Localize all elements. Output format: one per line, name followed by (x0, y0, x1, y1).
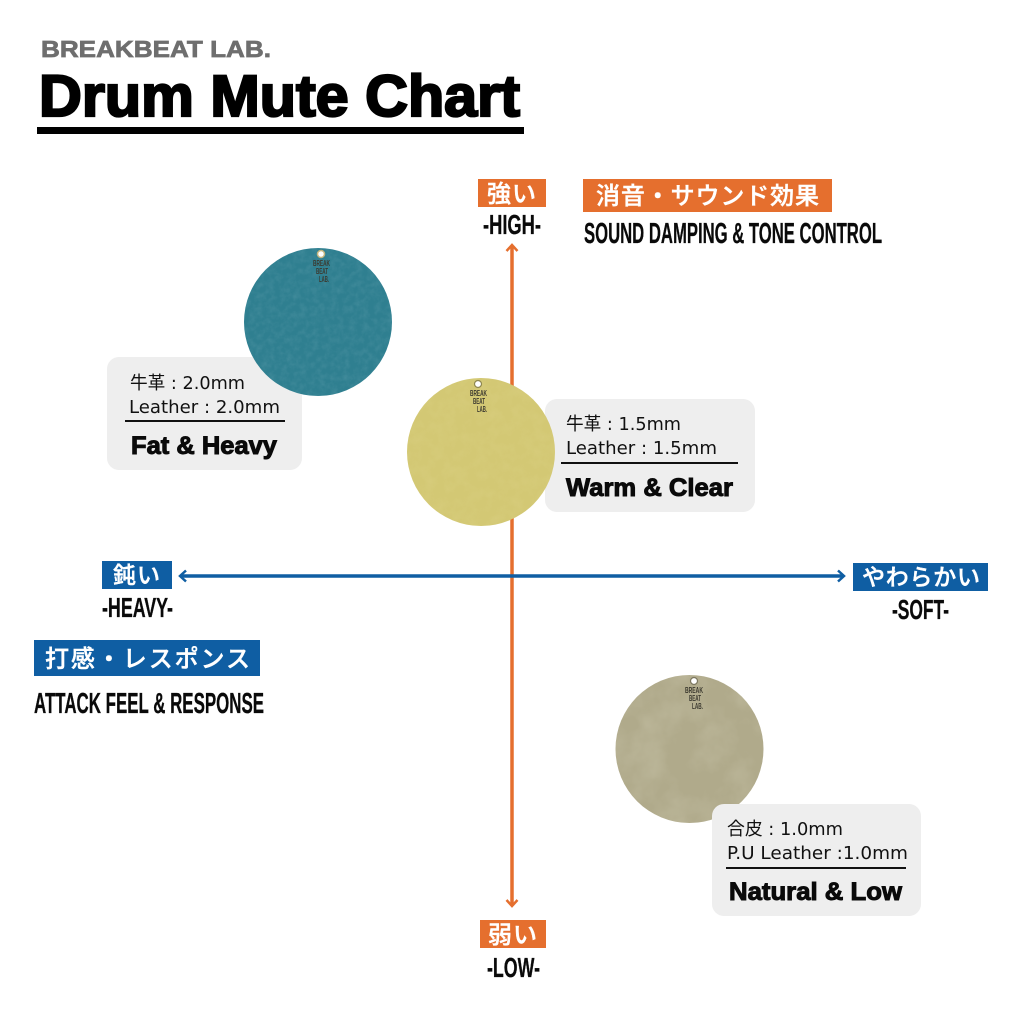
mute disc: teal 2.0mm leather (244, 248, 392, 396)
card: Natural & Low: Natural & Low (729, 878, 903, 906)
mute disc: natural 1.0mm PU leather: BREAK (685, 686, 703, 695)
mute disc: yellow 1.5mm leather: LAB. (477, 405, 487, 414)
bottom axis label: 弱い (488, 922, 538, 949)
mute disc: yellow 1.5mm leather: BREAK (470, 389, 487, 398)
card: Natural & Low (712, 804, 921, 916)
top axis label (478, 179, 546, 240)
brand name: BREAKBEAT LAB. (41, 36, 271, 62)
vertical axis arrow: sound damping (506, 245, 518, 906)
left axis label (102, 561, 173, 623)
mute disc: teal 2.0mm leather: LAB. (319, 275, 329, 284)
horizontal axis heading: 打感・レスポンス (45, 645, 250, 673)
left axis label: 鈍い (113, 562, 161, 588)
right axis label: -SOFT- (892, 594, 949, 625)
mute disc: natural 1.0mm PU leather: BEAT (689, 694, 701, 703)
mute disc: yellow 1.5mm leather (407, 378, 555, 526)
top axis label: 強い (487, 181, 537, 208)
card: Natural & Low: 合皮 : 1.0mm (727, 819, 843, 840)
card: Fat & Heavy (107, 357, 302, 470)
card: Warm & Clear: Leather : 1.5mm (566, 438, 717, 459)
mute disc: teal 2.0mm leather: BEAT (316, 267, 328, 276)
bottom axis label (480, 920, 546, 983)
card: Fat & Heavy: Fat & Heavy (131, 432, 277, 460)
title underline (37, 127, 524, 134)
card: Warm & Clear: Warm & Clear (566, 474, 733, 502)
horizontal axis heading: ATTACK FEEL & RESPONSE (34, 688, 264, 720)
card: Fat & Heavy: Leather : 2.0mm (129, 397, 280, 418)
right axis label: やわらかい (862, 564, 980, 590)
right axis label (853, 563, 988, 625)
mute disc: yellow 1.5mm leather: BEAT (473, 397, 485, 406)
bottom axis label: -LOW- (487, 952, 540, 983)
card: Natural & Low: P.U Leather :1.0mm (727, 843, 908, 864)
top axis label: -HIGH- (483, 209, 541, 240)
horizontal axis heading (34, 640, 264, 720)
left axis label: -HEAVY- (102, 592, 173, 623)
vertical axis heading: 消音・サウンド効果 (596, 183, 819, 210)
vertical axis heading (583, 179, 882, 250)
horizontal axis arrow: attack feel (180, 570, 844, 582)
mute disc: natural 1.0mm PU leather: LAB. (692, 702, 703, 711)
mute disc: teal 2.0mm leather: BREAK (313, 259, 330, 268)
title: Drum Mute Chart (39, 64, 520, 129)
card: Warm & Clear (545, 399, 755, 512)
header: brand and title (37, 36, 524, 134)
card: Warm & Clear: 牛革 : 1.5mm (566, 414, 681, 435)
mute disc: natural 1.0mm PU leather (616, 675, 764, 823)
card: Fat & Heavy: 牛革 : 2.0mm (130, 373, 245, 394)
